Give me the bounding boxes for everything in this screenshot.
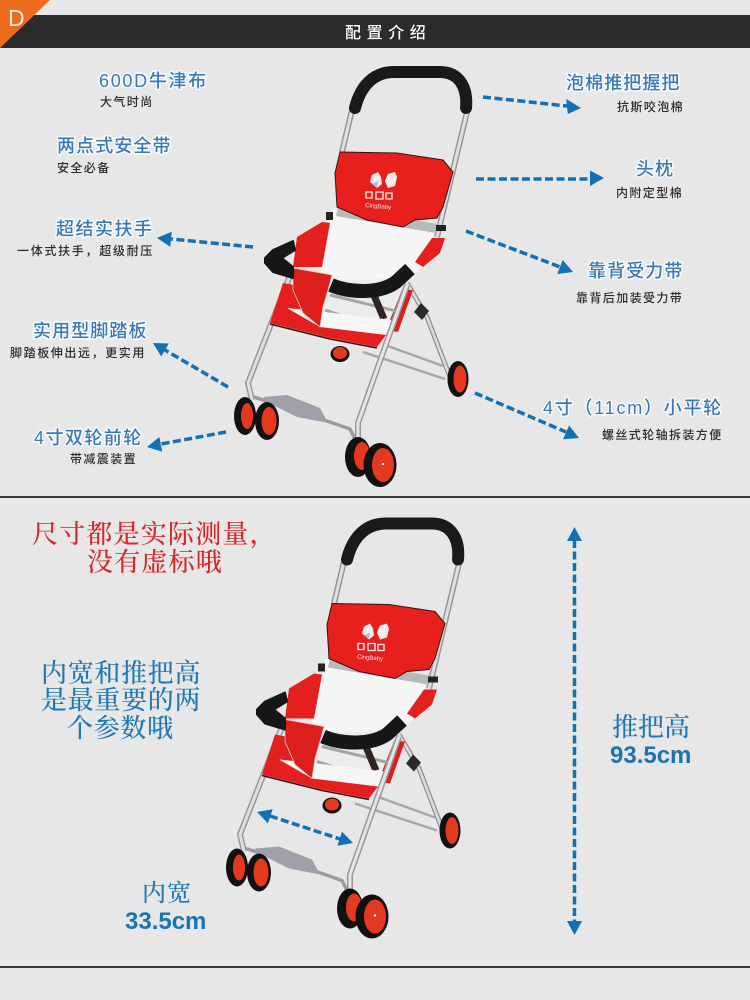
blue note (41, 659, 201, 743)
label: back strap: 靠背后加装受力带 (576, 290, 683, 305)
red note: 没有虚标哦 (87, 548, 223, 577)
label: safety belt: 安全必备 (57, 160, 111, 175)
label: footrest (10, 321, 148, 360)
height label: 93.5cm (610, 742, 691, 769)
height label (610, 713, 691, 769)
arrow: headrest (476, 170, 604, 186)
label: armrest: 超结实扶手 (56, 219, 154, 239)
width arrow (257, 809, 353, 846)
label: headrest: 内附定型棉 (616, 185, 683, 200)
corner badge: D (8, 5, 25, 31)
title: 配置介绍 (345, 24, 431, 42)
label: armrest: 一体式扶手，超级耐压 (17, 243, 154, 258)
label: safety belt: 两点式安全带 (57, 135, 172, 156)
arrow: front wheels (147, 432, 226, 452)
blue note: 个参数哦 (67, 714, 174, 743)
red note: 尺寸都是实际测量， (32, 520, 277, 549)
label: back strap (576, 261, 684, 305)
label: safety belt (57, 135, 172, 175)
corner badge (0, 0, 50, 48)
header bar (0, 15, 750, 48)
label: footrest: 实用型脚踏板 (33, 321, 148, 341)
blue note: 内宽和推把高 (41, 659, 201, 688)
width label: 33.5cm (125, 908, 206, 935)
stroller photo: features (234, 72, 468, 487)
label: fabric (99, 71, 208, 109)
blue note: 是最重要的两 (41, 686, 201, 715)
label: rear wheels: 螺丝式轮轴拆装方便 (602, 427, 723, 442)
label: front wheels (34, 428, 143, 466)
label: armrest (17, 219, 154, 258)
arrow: handle (483, 97, 581, 114)
label: rear wheels: 4寸（11cm）小平轮 (543, 398, 723, 418)
stroller photo: dimensions: CingBaby (357, 655, 383, 663)
height arrow (567, 527, 582, 935)
arrow: armrest (157, 232, 253, 247)
label: front wheels: 4寸双轮前轮 (34, 428, 143, 448)
stroller photo: features: CingBaby (365, 203, 391, 211)
width label: 内宽 (142, 880, 192, 907)
stroller photo: dimensions (226, 524, 460, 938)
label: footrest: 脚踏板伸出远，更实用 (10, 345, 146, 360)
label: handle: 泡棉推把握把 (566, 73, 681, 93)
arrow: rear wheels (475, 393, 579, 439)
width label (125, 880, 206, 935)
label: front wheels: 带减震装置 (70, 452, 137, 466)
height label: 推把高 (612, 713, 690, 742)
label: headrest (616, 159, 683, 200)
label: fabric: 600D牛津布 (99, 71, 208, 91)
label: handle: 抗斯咬泡棉 (617, 99, 684, 114)
label: back strap: 靠背受力带 (588, 261, 684, 281)
red note (32, 520, 277, 577)
label: fabric: 大气时尚 (100, 94, 154, 109)
label: handle (566, 73, 684, 114)
label: rear wheels (543, 398, 723, 442)
label: headrest: 头枕 (636, 159, 674, 179)
arrow: back strap (466, 231, 573, 274)
arrow: footrest (153, 343, 228, 387)
